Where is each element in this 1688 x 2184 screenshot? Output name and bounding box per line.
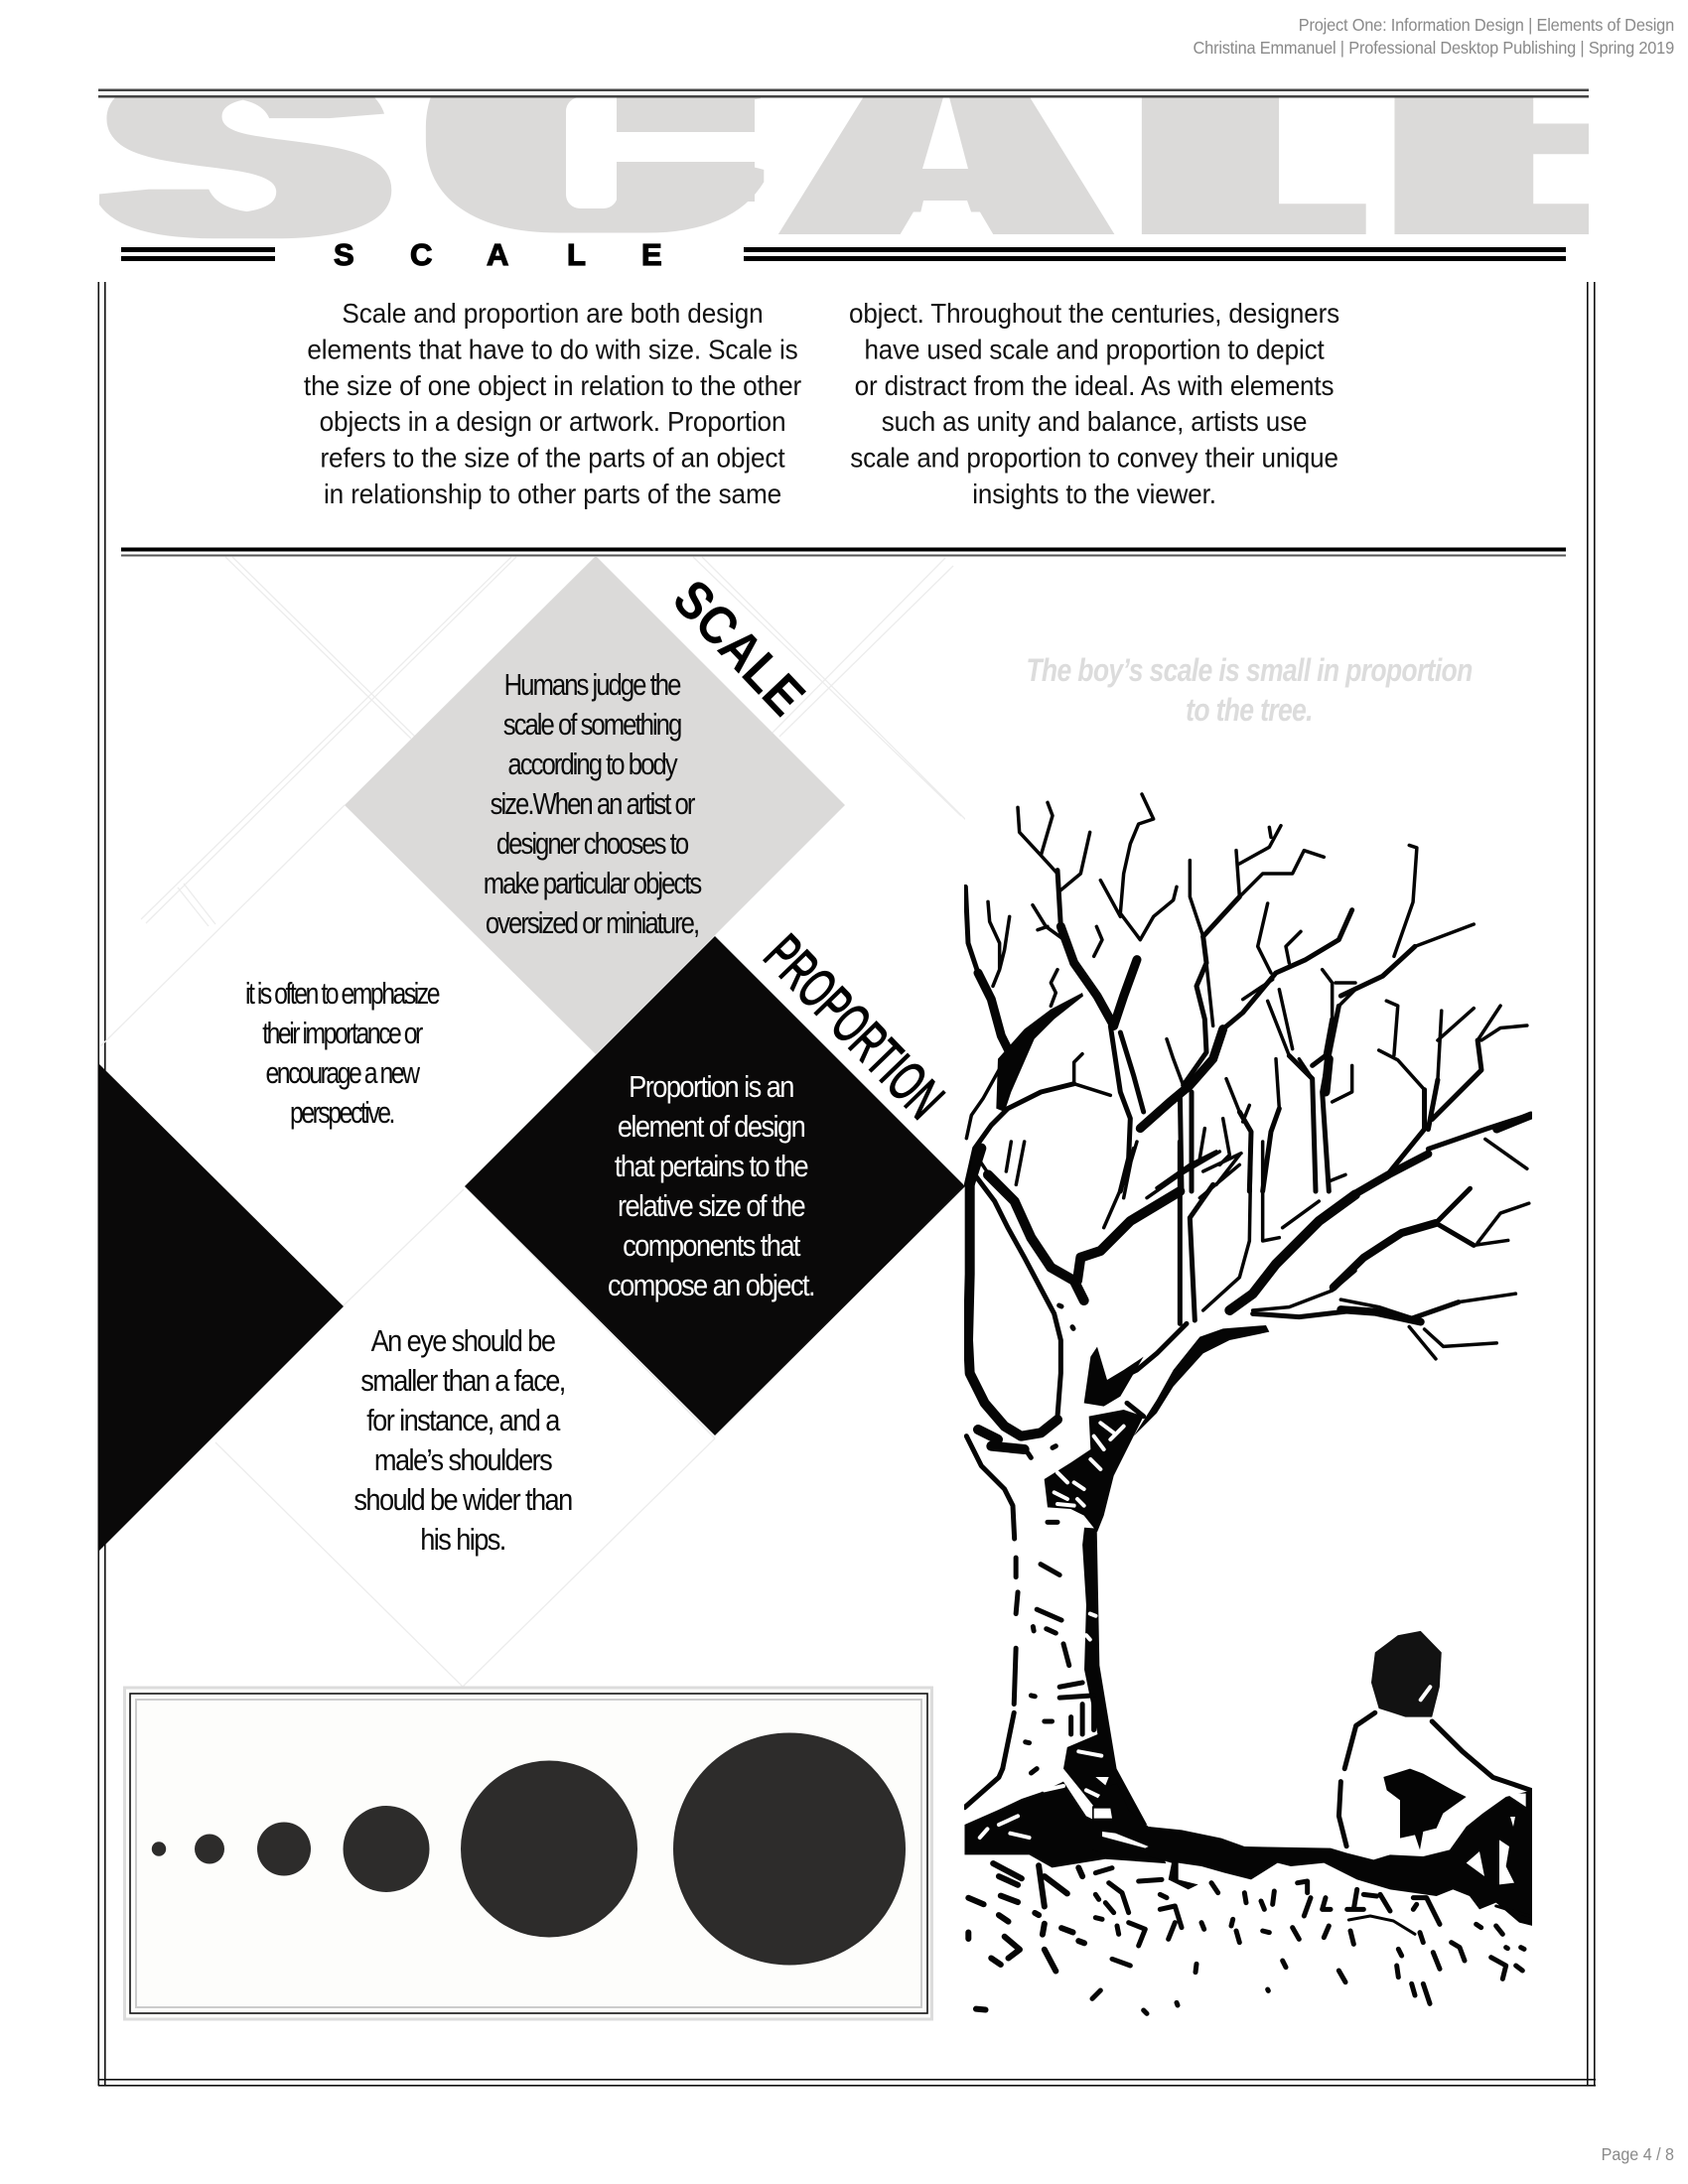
scale paragraph in gray diamond: designer chooses to (496, 827, 688, 862)
header credits (1194, 16, 1674, 58)
spaced subtitle with rules: E (641, 237, 662, 272)
scale paragraph in gray diamond: oversized or miniature, (486, 906, 698, 941)
spaced subtitle with rules: L (567, 237, 586, 272)
continuation paragraph: their importance or (262, 1016, 423, 1050)
intro text: right column: such as unity and balance, artists use (882, 406, 1307, 437)
eye and shoulders paragraph: for instance, and a (366, 1404, 561, 1437)
large background title: A (778, 12, 1115, 319)
intro text: right column: or distract from the ideal. As with elements (855, 370, 1334, 401)
spaced subtitle with rules: A (487, 237, 508, 272)
section divider rule (121, 548, 1566, 556)
intro text: left column: objects in a design or artwork. Proportion (320, 405, 785, 437)
intro text: left column: Scale and proportion are both design (342, 297, 764, 329)
spaced subtitle with rules (121, 237, 1566, 272)
caption above tree (1026, 653, 1473, 729)
spaced subtitle with rules: C (410, 237, 432, 272)
proportion paragraph in black diamond: compose an object. (608, 1269, 814, 1302)
continuation paragraph: encourage a new (265, 1055, 421, 1090)
proportion paragraph in black diamond: element of design (618, 1110, 805, 1144)
scale paragraph in gray diamond (484, 668, 702, 941)
intro text: left column: elements that have to do with size. Scale is (307, 334, 798, 365)
top double rule (98, 89, 1589, 97)
proportion paragraph in black diamond (608, 1070, 814, 1302)
intro text: left column (304, 297, 801, 509)
eye and shoulders paragraph: male’s shoulders (374, 1443, 552, 1477)
large background title: S (112, 26, 377, 286)
outer right branches (1334, 845, 1531, 1359)
upper-left branches (965, 794, 1355, 1191)
intro text: right column: scale and proportion to convey their unique (850, 443, 1338, 474)
intro text: right column: have used scale and proportion to depict (864, 335, 1325, 365)
trunk and left ground (964, 1528, 1531, 2010)
eye and shoulders paragraph: An eye should be (371, 1324, 555, 1358)
continuation paragraph (245, 976, 440, 1130)
header credits: Christina Emmanuel | Professional Desktop Publishing | Spring 2019 (1194, 39, 1674, 58)
illustration: boy under bare tree (964, 740, 1532, 2020)
outer frame double lines (97, 282, 1596, 2087)
scale paragraph in gray diamond: Humans judge the (504, 668, 681, 703)
caption above tree: The boy’s scale is small in proportion (1026, 653, 1473, 689)
intro text: left column: refers to the size of the parts of an object (320, 442, 785, 474)
faint diamond grid lines (100, 557, 983, 1687)
gray diamond: scale (345, 556, 845, 1054)
intro text: left column: in relationship to other parts of the same (324, 478, 781, 509)
eye and shoulders paragraph: smaller than a face, (360, 1364, 565, 1398)
black diamond: proportion (465, 936, 965, 1435)
intro text: left column: the size of one object in relation to the other (304, 369, 801, 401)
scale paragraph in gray diamond: scale of something (503, 708, 681, 743)
spaced subtitle with rules: S (334, 237, 354, 272)
proportion paragraph in black diamond: Proportion is an (629, 1070, 793, 1104)
framed circles showing scale progression (125, 1688, 931, 2019)
intro text: right column: object. Throughout the centuries, designers (849, 298, 1339, 329)
continuation paragraph: it is often to emphasize (245, 976, 440, 1011)
proportion paragraph in black diamond: relative size of the (618, 1189, 804, 1223)
intro text: right column: insights to the viewer. (972, 478, 1216, 509)
right ground, boy shirt and leaf marks (1092, 1769, 1532, 2013)
fork and lower branches (966, 1142, 1355, 1539)
eye and shoulders paragraph (353, 1324, 572, 1557)
proportion paragraph in black diamond: that pertains to the (615, 1150, 808, 1183)
continuation paragraph: perspective. (290, 1095, 394, 1130)
large background title (99, 97, 1589, 238)
page number: Page 4 / 8 (1602, 2144, 1674, 2164)
proportion paragraph in black diamond: components that (623, 1229, 800, 1263)
intro text: right column (849, 298, 1339, 509)
scale paragraph in gray diamond: size.When an artist or (491, 787, 695, 822)
scale paragraph in gray diamond: make particular objects (484, 867, 702, 901)
scale paragraph in gray diamond: according to body (507, 748, 678, 782)
rotated label: SCALE: SCALE (662, 569, 816, 727)
caption above tree: to the tree. (1186, 693, 1313, 729)
eye and shoulders paragraph: should be wider than (353, 1483, 572, 1517)
eye and shoulders paragraph: his hips. (420, 1523, 505, 1557)
header credits: Project One: Information Design | Elements of Design (1299, 16, 1674, 35)
boy head and outline (1371, 1631, 1442, 1717)
rotated label: PROPORTION: PROPORTION (753, 923, 956, 1130)
black triangle at left edge (98, 1063, 344, 1552)
